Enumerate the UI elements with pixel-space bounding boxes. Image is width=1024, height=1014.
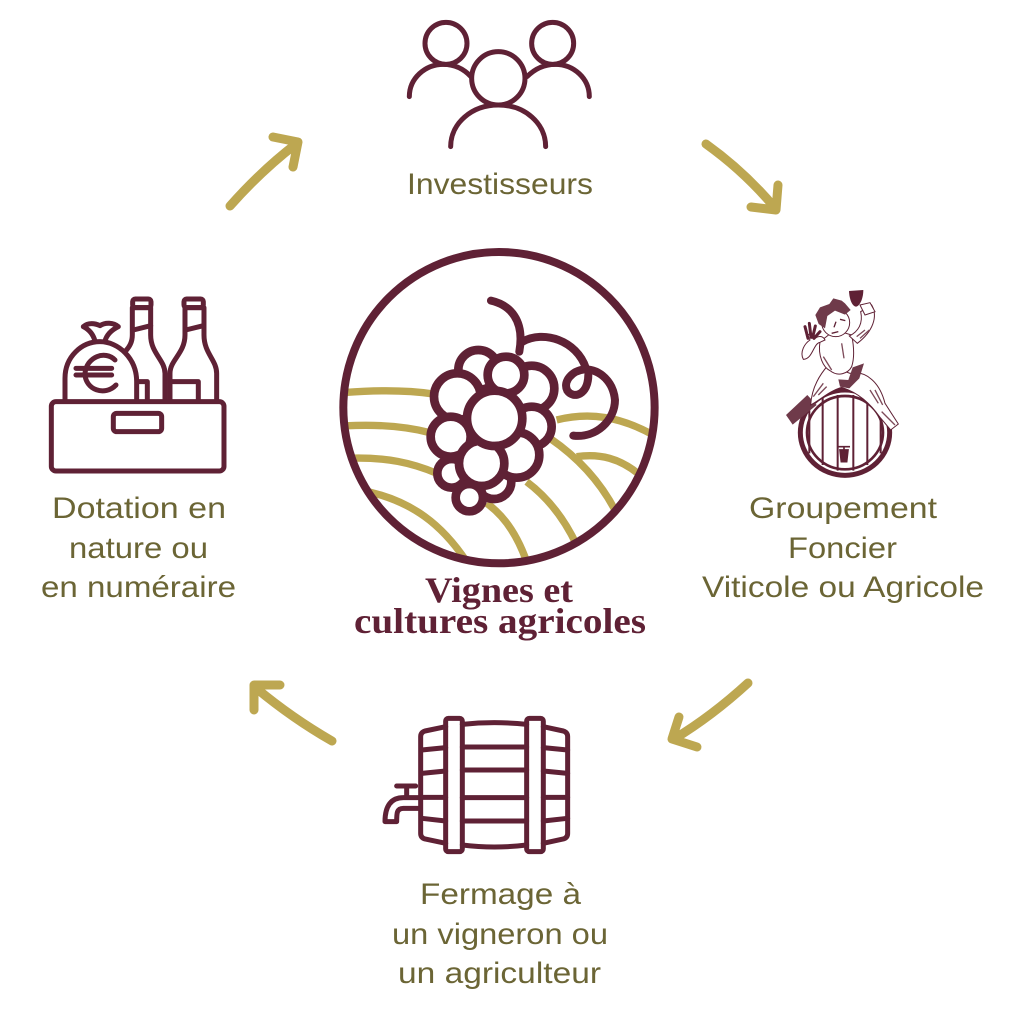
label: land group: Foncier	[788, 532, 897, 565]
label: investors: Investisseurs	[407, 168, 593, 201]
label: endowment: nature ou	[69, 532, 208, 565]
arrow: investors to land group	[706, 144, 778, 210]
label: tenant farming: un agriculteur	[398, 957, 601, 990]
outer ring	[343, 252, 655, 563]
icon: investors	[409, 22, 589, 147]
label: land group	[702, 492, 984, 604]
title: central: cultures agricoles	[354, 601, 646, 641]
vineyard rows	[343, 391, 653, 562]
title: central	[354, 570, 646, 641]
label: tenant farming	[392, 878, 608, 990]
label: land group: Viticole ou Agricole	[702, 571, 984, 604]
arrow: land group to tenant farming	[672, 683, 748, 747]
grape cluster	[431, 350, 554, 511]
arrow: endowment to investors	[230, 137, 298, 206]
label: endowment: en numéraire	[41, 571, 236, 604]
label: land group: Groupement	[749, 492, 938, 525]
title: central: Vignes et	[425, 570, 573, 610]
label: tenant farming: un vigneron ou	[392, 918, 608, 951]
icon: crate with money bag and bottles	[51, 299, 224, 471]
arrow: tenant farming to endowment	[254, 685, 332, 741]
central emblem: vineyard and grapes	[343, 252, 655, 563]
icon: cherub on barrel	[786, 290, 898, 475]
label: endowment	[41, 492, 236, 604]
icon: barrel with tap	[385, 718, 568, 852]
vine stem and tendril	[491, 301, 615, 436]
label: tenant farming: Fermage à	[420, 878, 581, 911]
label: endowment: Dotation en	[52, 492, 226, 525]
